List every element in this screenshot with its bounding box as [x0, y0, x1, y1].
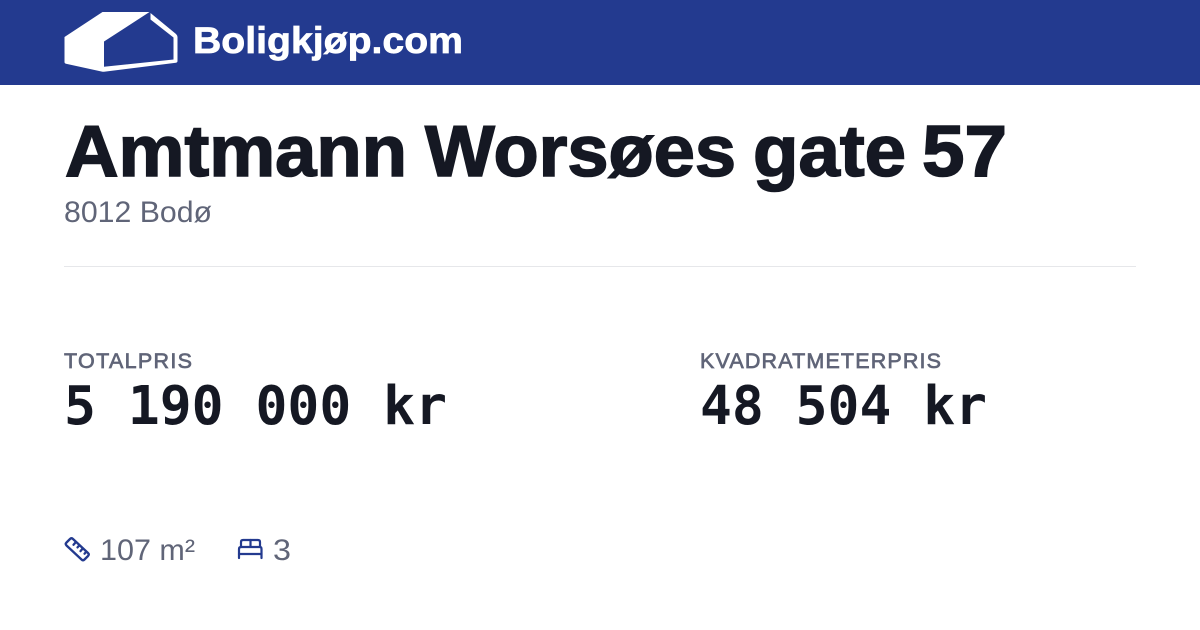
title	[65, 111, 1007, 192]
title: gate	[753, 111, 906, 192]
total price label: TOTALPRIS	[64, 349, 192, 373]
title: Worsøes	[425, 111, 736, 192]
title: Amtmann	[65, 111, 407, 192]
price per square metre value: 48 504 kr	[700, 375, 987, 437]
brand name: Boligkjøp.com	[193, 19, 463, 61]
stat: price per square metre	[700, 349, 987, 437]
icon: house logo	[64, 12, 178, 72]
header band	[0, 0, 1200, 85]
title: 57	[922, 111, 1007, 192]
subtitle: postal address: 8012 Bodø	[64, 196, 212, 229]
price per square metre label: KVADRATMETERPRIS	[700, 349, 941, 373]
icon: ruler	[66, 538, 89, 560]
icon: bed	[239, 540, 262, 558]
area value: 107 m²	[100, 534, 195, 567]
stat: total price	[64, 349, 447, 437]
total price value: 5 190 000 kr	[64, 375, 447, 437]
bedrooms value: 3	[273, 534, 291, 567]
divider	[64, 266, 1136, 267]
